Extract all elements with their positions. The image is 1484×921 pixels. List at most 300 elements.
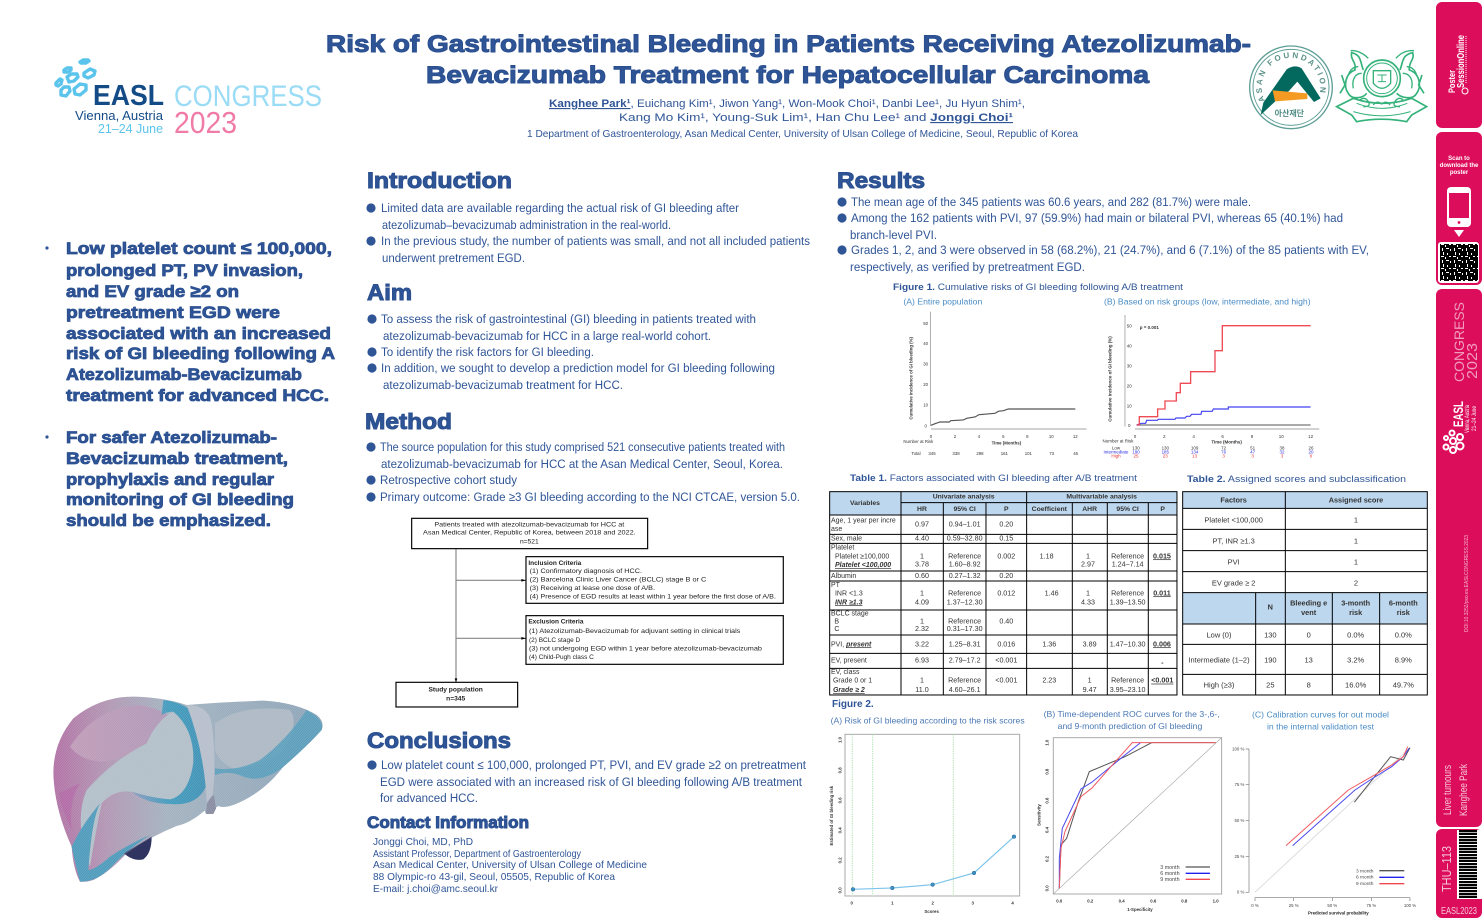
table 1: factors associated with GI bleeding: Coefficient [1032, 506, 1068, 513]
table 2: assigned scores: 1 [1354, 516, 1358, 525]
chart: figure 1A cumulative incidence: 101 [1025, 451, 1033, 456]
table 1: factors associated with GI bleeding: PVI, present [831, 641, 872, 648]
chart: figure 1B risk groups: 32 [1279, 450, 1285, 455]
chart: figure 1A cumulative incidence: 0 [930, 434, 933, 439]
section: Aim: atezolizumab-bevacizumab for HCC in a large real-world cohort. [383, 329, 711, 343]
chart: figure 2B ROC curves: 0.0 [1056, 898, 1063, 903]
chart: figure 2C calibration curves: 50 % [1327, 903, 1337, 908]
table 1 caption: Table 1. Factors associated with GI bleeding after A/B treatment [850, 473, 1137, 484]
section: Introduction: underwent pretrement EGD. [382, 251, 525, 265]
chart: figure 1B risk groups: 26 [1308, 445, 1314, 450]
EASL Congress logo: Vienna, Austria [75, 108, 164, 123]
table 1: factors associated with GI bleeding: Age, 1 year per incre [831, 517, 896, 524]
section: Introduction: Introduction [367, 168, 512, 193]
chart: figure 1A cumulative incidence: 6 [1002, 434, 1005, 439]
table 1: factors associated with GI bleeding: 2.97 [1081, 561, 1095, 569]
table 1: factors associated with GI bleeding: 3.22 [915, 640, 929, 648]
table 2: assigned scores: 190 [1264, 656, 1277, 665]
table 1: factors associated with GI bleeding: <0.001 [995, 677, 1017, 685]
chart: figure 1A cumulative incidence [903, 297, 1087, 456]
key takeaways text: Low platelet count ≤ 100,000, [66, 239, 332, 258]
chart: figure 1B risk groups: 20 [1308, 450, 1314, 455]
table 1: factors associated with GI bleeding: 0.015 [1153, 552, 1171, 560]
sidebar: scan to download: Scan to [1448, 156, 1470, 162]
chart: figure 2B ROC curves: 0.4 [1119, 898, 1125, 903]
chart: figure 2A risk by score: 0 [850, 900, 853, 905]
chart: figure 1B risk groups: 20 [1127, 383, 1132, 388]
table 2: assigned scores: Low (0) [1207, 631, 1232, 640]
chart: figure 1B risk groups: 3 [1251, 454, 1254, 459]
table 1: factors associated with GI bleeding: - [1161, 659, 1164, 667]
table 2: assigned scores: 130 [1264, 631, 1277, 640]
chart: figure 2B ROC curves: 9 month [1160, 877, 1180, 883]
flowchart: study population: Study population [428, 687, 483, 694]
chart: figure 1A cumulative incidence: 12 [1073, 434, 1078, 439]
flowchart: study population: n=345 [446, 696, 465, 703]
chart: figure 1A cumulative incidence: 46 [1073, 451, 1079, 456]
chart: figure 1B risk groups: 6 [1221, 434, 1224, 439]
icon: phone [1447, 187, 1471, 227]
table 1: factors associated with GI bleeding: 1 [1086, 589, 1090, 597]
section: Aim: To assess the risk of gastrointestinal (GI) bleeding in patients treated with [381, 312, 756, 326]
sidebar: scan to download [1436, 132, 1482, 285]
chart: figure 1B risk groups: 0 [1128, 423, 1131, 428]
chart: figure 2C calibration curves: 100 % [1232, 746, 1244, 751]
section: Aim: atezolizumab-bevacizumab treatment for HCC. [383, 378, 623, 392]
chart: figure 2B ROC curves: Sensitivity [1037, 804, 1042, 826]
sidebar: scan to download: poster [1450, 170, 1469, 176]
table 1: factors associated with GI bleeding: 95% CI [953, 506, 976, 513]
chart: figure 1A cumulative incidence: 298 [976, 451, 984, 456]
chart: figure 1A cumulative incidence: 50 [923, 321, 929, 326]
chart: figure 1B risk groups [1103, 297, 1319, 459]
chart: figure 1A cumulative incidence: Total [911, 451, 921, 456]
chart: figure 1B risk groups: 12 [1308, 434, 1314, 439]
table 1: factors associated with GI bleeding: 0.012 [997, 589, 1015, 597]
section: Aim: To identify the risk factors for GI bleeding. [381, 345, 594, 359]
table 1: factors associated with GI bleeding: 0.011 [1153, 589, 1171, 597]
table 1: factors associated with GI bleeding: 0.31–17.30 [947, 625, 983, 633]
table 1: factors associated with GI bleeding: 1.36 [1042, 640, 1056, 648]
chart: figure 1A cumulative incidence: 30 [923, 362, 929, 367]
chart: figure 2A risk by score: 1.0 [837, 736, 842, 743]
flowchart: study population: Inclusion Criteria [528, 560, 582, 567]
table 2: assigned scores: 49.7% [1393, 680, 1414, 689]
illustration: liver [53, 697, 323, 882]
chart: figure 1B risk groups: 23 [1163, 454, 1168, 459]
sidebar: poster session online [1436, 2, 1482, 128]
table 2: assigned scores: Intermediate (1–2) [1188, 656, 1250, 665]
table 2: assigned scores: 8.9% [1395, 656, 1412, 665]
table 1: factors associated with GI bleeding: 0.20 [999, 572, 1013, 580]
table 1: factors associated with GI bleeding: 0.016 [997, 640, 1015, 648]
section: Contact Information: E-mail: j.choi@amc.seoul.kr [373, 884, 499, 895]
chart: figure 1B risk groups: 3 [1222, 454, 1225, 459]
table 1: factors associated with GI bleeding: Platelet <100,000 [835, 562, 891, 569]
sidebar: EASL Congress banner: Kanghee Park [1458, 764, 1470, 816]
section: Results: Results [837, 168, 925, 193]
key takeaways text: For safer Atezolizumab- [66, 428, 277, 447]
table 1: factors associated with GI bleeding: HR [917, 506, 927, 513]
logo: University of Ulsan crest [1337, 51, 1427, 122]
table 2: assigned scores: PT, INR ≥1.3 [1212, 537, 1255, 546]
chart: figure 2B ROC curves: 1.0 [1045, 739, 1050, 746]
table 1: factors associated with GI bleeding: 0.006 [1153, 640, 1171, 648]
chart: figure 1B risk groups: 72 [1221, 445, 1227, 450]
chart: figure 2C calibration curves: 9 month [1356, 881, 1374, 887]
table 2: assigned scores: 0.0% [1347, 631, 1365, 640]
flowchart: study population: (4) Presence of EGD results at least within 1 year before the first dose of A/B. [530, 593, 776, 600]
table 1: factors associated with GI bleeding: Reference [1111, 589, 1144, 597]
EASL Congress logo: EASL [93, 80, 164, 112]
table 1: factors associated with GI bleeding: 1.60–8.92 [949, 561, 981, 569]
section: Results: respectively, as verified by pretreatment EGD. [850, 260, 1085, 274]
table 2: assigned scores: High (≥3) [1204, 680, 1235, 689]
chart: figure 2A risk by score: Estimated of GI bleeding risk [829, 785, 834, 845]
table 1: factors associated with GI bleeding: 0.40 [999, 617, 1013, 625]
table 2: assigned scores: EV grade ≥ 2 [1212, 579, 1255, 588]
table 1: factors associated with GI bleeding: B [834, 618, 839, 625]
table 2: assigned scores: 25 [1266, 680, 1274, 689]
authors and affiliation: Kanghee Park¹, Euichang Kim¹, Jiwon Yang¹, Won-Mook Choi¹, Danbi Lee¹, Ju Hyun Shim¹, [549, 98, 1025, 110]
chart: figure 2A risk by score [829, 716, 1025, 914]
chart: figure 1B risk groups: 134 [1191, 450, 1199, 455]
table 1: factors associated with GI bleeding: Reference [948, 617, 981, 625]
table 1: factors associated with GI bleeding: 4.09 [915, 598, 929, 606]
flowchart: study population: Patients treated with atezolizumab-bevacizumab for HCC at [434, 521, 624, 528]
table 1: factors associated with GI bleeding: 4.33 [1081, 598, 1095, 606]
sidebar: EASL Congress banner: CONGRESS [1451, 302, 1467, 382]
table 1: factors associated with GI bleeding: INR <1.3 [835, 590, 863, 597]
table 1: factors associated with GI bleeding: C [834, 626, 839, 633]
table 1: factors associated with GI bleeding: Platelet ≥100,000 [835, 553, 889, 560]
table 2: assigned scores: 3.2% [1347, 656, 1365, 665]
EASL Congress logo: CONGRESS [174, 80, 322, 113]
table 1: factors associated with GI bleeding: Reference [948, 552, 981, 560]
authors and affiliation [527, 98, 1078, 140]
table 1: factors associated with GI bleeding: 3.89 [1083, 640, 1097, 648]
chart: figure 1B risk groups: 25 [1133, 454, 1139, 459]
section: Contact Information [367, 814, 647, 895]
chart: figure 2B ROC curves: 0.6 [1045, 797, 1050, 804]
sidebar: EASL Congress banner: EASL [1450, 401, 1466, 427]
table 1: factors associated with GI bleeding: P [1004, 506, 1009, 513]
table 1: factors associated with GI bleeding: 2.79–17.2 [949, 657, 981, 665]
chart: figure 1A cumulative incidence: 0 [924, 423, 927, 428]
chart: figure 1A cumulative incidence: 8 [1026, 434, 1029, 439]
table 1: factors associated with GI bleeding: Reference [1111, 677, 1144, 685]
chart: figure 2A risk by score: 1 [891, 900, 894, 905]
chart: figure 1A cumulative incidence: 4 [978, 434, 981, 439]
sidebar: EASL Congress banner [1436, 289, 1482, 827]
chart: figure 2B ROC curves: and 9-month prediction of GI bleeding [1058, 721, 1202, 731]
EASL Congress logo: 21–24 June [98, 122, 163, 136]
table 2: assigned scores: Factors [1220, 496, 1247, 505]
table 1: factors associated with GI bleeding: Grade ≥ 2 [833, 687, 865, 694]
table 1: factors associated with GI bleeding: Albumin [831, 573, 856, 580]
table 1: factors associated with GI bleeding: 1 [920, 552, 924, 560]
section: Results: Grades 1, 2, and 3 were observed in 58 (68.2%), 21 (24.7%), and 6 (7.1%) of the 85 patients with EV, [851, 243, 1369, 257]
table 1: factors associated with GI bleeding: 1.25–8.31 [949, 640, 981, 648]
table 1: factors associated with GI bleeding: 6.93 [915, 657, 929, 665]
logo: Asan Foundation: ASAN FOUNDATION [1256, 52, 1326, 101]
sidebar: poster ID and barcode [1436, 829, 1482, 918]
section: Conclusions: Low platelet count ≤ 100,000, prolonged PT, PVI, and EV grade ≥2 on pretreatment [381, 758, 807, 772]
EASL Congress logo: 2023 [174, 105, 237, 140]
chart: figure 2C calibration curves: 75 % [1234, 782, 1244, 787]
table 2: assigned scores: Bleeding e [1290, 599, 1327, 608]
chart: figure 2B ROC curves: 6 month [1160, 871, 1180, 877]
chart: figure 1A cumulative incidence: 345 [928, 451, 936, 456]
chart: figure 1B risk groups: Time (Months) [1211, 439, 1242, 444]
table 1: factors associated with GI bleeding: 0.27–1.32 [949, 572, 981, 580]
icon: EASL hexagon cluster [56, 60, 95, 96]
table 2: assigned scores: 6-month [1389, 599, 1418, 608]
chart: figure 2C calibration curves: 6 month [1356, 875, 1374, 881]
chart: figure 1A cumulative incidence: 10 [923, 403, 929, 408]
chart: figure 1A cumulative incidence: 20 [923, 382, 929, 387]
chart: figure 1B risk groups: p = 0.001 [1140, 325, 1159, 330]
chart: figure 2A risk by score: 2 [931, 900, 934, 905]
table 2: assigned scores: 1 [1354, 537, 1358, 546]
chart: figure 1B risk groups: Cumulative Incidence of GI bleeding (%) [1108, 336, 1113, 422]
chart: figure 1B risk groups: 51 [1250, 445, 1256, 450]
chart: figure 1B risk groups: 4 [1192, 434, 1195, 439]
chart: figure 1A cumulative incidence: 73 [1049, 451, 1055, 456]
chart: figure 1A cumulative incidence: Cumulative Incidence of GI bleeding (%) [909, 337, 914, 420]
section: Contact Information: Jonggi Choi, MD, PhD [373, 837, 473, 848]
key takeaways text: prophylaxis and regular [66, 470, 275, 489]
table 1: factors associated with GI bleeding: 1.37–12.30 [947, 598, 983, 606]
chart: figure 1B risk groups: 109 [1191, 445, 1199, 450]
section: Contact Information: 88 Olympic-ro 43-gil, Seoul, 05505, Republic of Korea [373, 872, 615, 883]
chart: figure 1B risk groups: 10 [1127, 403, 1132, 408]
table 1: factors associated with GI bleeding: EV, present [831, 658, 867, 665]
table 1: factors associated with GI bleeding: 3.78 [915, 561, 929, 569]
section: Conclusions [367, 728, 807, 805]
chart: figure 1B risk groups: 50 [1127, 323, 1132, 328]
table 1: factors associated with GI bleeding: Multivariable analysis [1066, 494, 1137, 501]
table 1: factors associated with GI bleeding: 0.59–32.80 [947, 535, 983, 543]
table 1: factors associated with GI bleeding: Variables [850, 500, 880, 507]
chart: figure 1B risk groups: 130 [1162, 445, 1170, 450]
sidebar: EASL Congress banner: 2023 [1464, 343, 1481, 379]
table 1: factors associated with GI bleeding: 0.94–1.01 [949, 520, 981, 528]
chart: figure 1A cumulative incidence: 338 [952, 451, 960, 456]
chart: figure 2B ROC curves: 0.6 [1150, 898, 1157, 903]
table 1: factors associated with GI bleeding: Reference [948, 677, 981, 685]
sidebar: poster session online: SessionOnline [1456, 35, 1467, 88]
icon: hexagons [1444, 430, 1464, 453]
flowchart: study population: (1) Confirmatory diagnosis of HCC. [530, 568, 642, 575]
chart: figure 1B risk groups: 190 [1132, 450, 1140, 455]
section: Method: Method [365, 409, 452, 434]
table 2: assigned scores: 13 [1304, 656, 1313, 665]
chart: figure 1B risk groups: 10 [1279, 434, 1284, 439]
chart: figure 2A risk by score: 0.2 [837, 857, 842, 863]
key takeaways text: risk of GI bleeding following A [66, 344, 335, 363]
key takeaways text: monitoring of GI bleeding [66, 490, 294, 509]
sidebar: scan to download: download the [1440, 163, 1479, 169]
flowchart: study population: (2) Barcelona Clinic Liver Cancer (BCLC) stage B or C [530, 576, 707, 583]
figure 1 caption: Figure 1. Cumulative risks of GI bleeding following A/B treatment [893, 282, 1183, 293]
section: Aim [367, 280, 775, 392]
QR code [1438, 242, 1479, 283]
table 1: factors associated with GI bleeding: Univariate analysis [933, 494, 995, 501]
sidebar: EASL Congress banner: DOI:10.3252/pso.eu.EASLCONGRESS.2023 [1464, 535, 1470, 632]
section: Results [837, 168, 1369, 274]
flowchart: study population: (3) not undergoing EGD within 1 year before atezolizumab-bevacizumab [529, 645, 762, 652]
table 2: assigned scores: 1 [1354, 558, 1358, 567]
chart: figure 2B ROC curves [1037, 709, 1222, 912]
table 1: factors associated with GI bleeding: 0.002 [997, 552, 1015, 560]
chart: figure 2C calibration curves: 0 % [1237, 890, 1244, 895]
key takeaways text: pretreatment EGD were [66, 303, 280, 322]
sidebar: EASL Congress banner: Vienna, Austria [1465, 405, 1471, 433]
table 1: factors associated with GI bleeding: Platelet [831, 544, 854, 551]
table 2: assigned scores: 0 [1307, 631, 1311, 640]
chart: figure 1A cumulative incidence: 161 [1001, 451, 1009, 456]
table 1: factors associated with GI bleeding: 4.40 [915, 535, 929, 543]
chart: figure 1A cumulative incidence: 2 [954, 434, 957, 439]
chart: figure 2C calibration curves: 25 % [1234, 854, 1244, 859]
chart: figure 2C calibration curves: 3 month [1356, 868, 1374, 874]
section: Results: Among the 162 patients with PVI, 97 (59.9%) had main or bilateral PVI, whereas 65 (40.1%) had [851, 211, 1343, 225]
table 1: factors associated with GI bleeding: Reference [1111, 552, 1144, 560]
section: Aim: In addition, we sought to develop a prediction model for GI bleeding following [381, 361, 775, 375]
flowchart: study population: (2) BCLC stage D [529, 637, 580, 644]
table 2: assigned scores: 8 [1307, 680, 1311, 689]
table 1: factors associated with GI bleeding: 1.39–13.50 [1110, 598, 1146, 606]
chart: figure 1B risk groups: 0 [1134, 434, 1137, 439]
chart: figure 2B ROC curves: 0.0 [1045, 885, 1050, 891]
table 1: factors associated with GI bleeding: BCLC stage [831, 610, 869, 617]
chart: figure 2C calibration curves: in the internal validation test [1267, 721, 1375, 731]
chart: figure 1B risk groups: High [1111, 454, 1121, 459]
table 2: assigned scores: risk [1397, 608, 1411, 617]
chart: figure 2B ROC curves: (B) Time-dependent ROC curves for the 3-,6-, [1044, 709, 1220, 719]
chart: figure 2C calibration curves: 25 % [1289, 903, 1299, 908]
chart: figure 1B risk groups: Low [1112, 445, 1121, 450]
flowchart: study population: (4) Child-Pugh class C [529, 654, 594, 661]
chart: figure 1B risk groups: 13 [1192, 454, 1198, 459]
logo: Asan Foundation: 아산재단 [1275, 108, 1305, 119]
flowchart: study population: (1) Atezolizumab-Bevacizumab for adjuvant setting in clinical trials [529, 628, 741, 635]
chart: figure 2B ROC curves: 3 month [1160, 865, 1180, 871]
chart: figure 1B risk groups: Intermediate [1104, 450, 1129, 455]
table 1: factors associated with GI bleeding: 1.47–10.30 [1110, 640, 1146, 648]
flowchart: study population [396, 518, 783, 707]
key takeaways text: should be emphasized. [66, 511, 271, 530]
flowchart: study population: Asan Medical Center, Republic of Korea, between 2018 and 2022. [423, 529, 636, 536]
chart: figure 1B risk groups: 185 [1162, 450, 1170, 455]
table 1: factors associated with GI bleeding: 11.0 [915, 686, 929, 694]
key takeaways text: and EV grade ≥2 on [66, 282, 239, 301]
key takeaways text: prolonged PT, PV invasion, [66, 261, 303, 280]
table 1: factors associated with GI bleeding: 0.20 [999, 520, 1013, 528]
section: Conclusions: Conclusions [367, 728, 511, 753]
title: Bevacizumab Treatment for Hepatocellular Carcinoma [426, 62, 1149, 89]
table 2: assigned scores: risk [1349, 608, 1363, 617]
table 1: factors associated with GI bleeding: P [1160, 506, 1165, 513]
section: Method: The source population for this study comprised 521 consecutive patients treated with [380, 440, 785, 454]
chart: figure 2B ROC curves: 1.0 [1213, 898, 1219, 903]
table 1: factors associated with GI bleeding: Sex, male [831, 536, 862, 543]
chart: figure 2C calibration curves [1232, 709, 1416, 916]
chart: figure 1B risk groups: 8 [1251, 434, 1254, 439]
chart: figure 2C calibration curves: 0 % [1251, 903, 1259, 908]
EASL Congress logo [56, 60, 322, 140]
table 2: assigned scores: N [1268, 603, 1273, 612]
table 1: factors associated with GI bleeding: 1.46 [1045, 589, 1059, 597]
section: Method: Primary outcome: Grade ≥3 GI bleeding according to the NCI CTCAE, version 5.0. [380, 490, 800, 504]
chart: figure 1A cumulative incidence: Number at Risk [903, 439, 934, 444]
chart: figure 2C calibration curves: 75 % [1366, 903, 1376, 908]
chart: figure 2C calibration curves: 50 % [1234, 818, 1244, 823]
sidebar: EASL Congress banner: 21–24 June [1472, 405, 1478, 431]
table 2 caption: Table 2. Assigned scores and subclassification [1187, 474, 1406, 485]
chart: figure 2B ROC curves: 0.8 [1181, 898, 1188, 903]
sidebar: poster ID and barcode: THU–113 [1439, 846, 1454, 892]
section: Method: atezolizumab-bevacizumab for HCC at the Asan Medical Center, Seoul, Korea. [381, 457, 783, 471]
flowchart: study population: (3) Receiving at lease one dose of A/B. [530, 585, 655, 592]
chart: figure 1B risk groups: Number at Risk [1103, 438, 1134, 443]
section: Introduction [366, 168, 810, 265]
chart: figure 1B risk groups: (B) Based on risk groups (low, intermediate, and high) [1104, 297, 1311, 307]
chart: figure 2B ROC curves: 0.4 [1045, 826, 1050, 833]
chart: figure 2A risk by score: 0.4 [837, 827, 842, 833]
section: Results: The mean age of the 345 patients was 60.6 years, and 282 (81.7%) were male. [851, 195, 1251, 209]
table 1: factors associated with GI bleeding: 4.60–26.1 [949, 686, 981, 694]
table 1: factors associated with GI bleeding: 1 [920, 677, 924, 685]
chart: figure 1B risk groups: 47 [1250, 450, 1256, 455]
chart: figure 2A risk by score: (A) Risk of GI bleeding according to the risk scores [831, 716, 1025, 726]
table 1: factors associated with GI bleeding: Grade 0 or 1 [833, 678, 872, 685]
chart: figure 1B risk groups: 130 [1132, 445, 1140, 450]
section: Contact Information: Assistant Professor, Department of Gastroenterology [373, 849, 582, 860]
table 1: factors associated with GI bleeding: 1 [1088, 677, 1092, 685]
table 2: assigned scores: PVI [1228, 558, 1240, 567]
table 1: factors associated with GI bleeding: 2.23 [1042, 677, 1056, 685]
chart: figure 1A cumulative incidence: 10 [1049, 434, 1054, 439]
table 1: factors associated with GI bleeding: 1 [920, 617, 924, 625]
section: Method [365, 409, 800, 504]
chart: figure 2A risk by score: 0.6 [837, 797, 842, 803]
section: Results: branch-level PVI. [850, 228, 937, 242]
table 2: assigned scores: 0.0% [1395, 631, 1412, 640]
key takeaways text: treatment for advanced HCC. [66, 386, 329, 405]
table 2: assigned scores: 16.0% [1345, 680, 1367, 689]
table 1: factors associated with GI bleeding: 1.18 [1040, 552, 1054, 560]
sidebar: poster session online: Poster [1447, 70, 1457, 93]
chart: figure 1B risk groups: 40 [1127, 343, 1132, 348]
table 1: factors associated with GI bleeding: 95% CI [1116, 506, 1139, 513]
table 1: factors associated with GI bleeding: <0.001 [995, 657, 1017, 665]
table 2: assigned scores: Platelet <100,000 [1204, 516, 1263, 525]
chart: figure 1A cumulative incidence: (A) Entire population [903, 297, 983, 307]
table 1: factors associated with GI bleeding: ase [831, 526, 842, 533]
table 1: factors associated with GI bleeding: PT [831, 582, 841, 589]
section: Introduction: atezolizumab–bevacizumab administration in the real-world. [382, 218, 671, 232]
table 1: factors associated with GI bleeding: <0.001 [1151, 677, 1173, 685]
section: Contact Information: Contact Information [367, 814, 529, 832]
key takeaways text [45, 239, 335, 530]
chart: figure 2B ROC curves: 0.2 [1045, 855, 1050, 862]
chart: figure 2B ROC curves: 0.2 [1087, 898, 1094, 903]
table 2: assigned scores: Assigned score [1329, 496, 1383, 505]
sidebar: EASL Congress banner: Liver tumours [1442, 765, 1454, 815]
icon: down arrow [1454, 230, 1464, 237]
